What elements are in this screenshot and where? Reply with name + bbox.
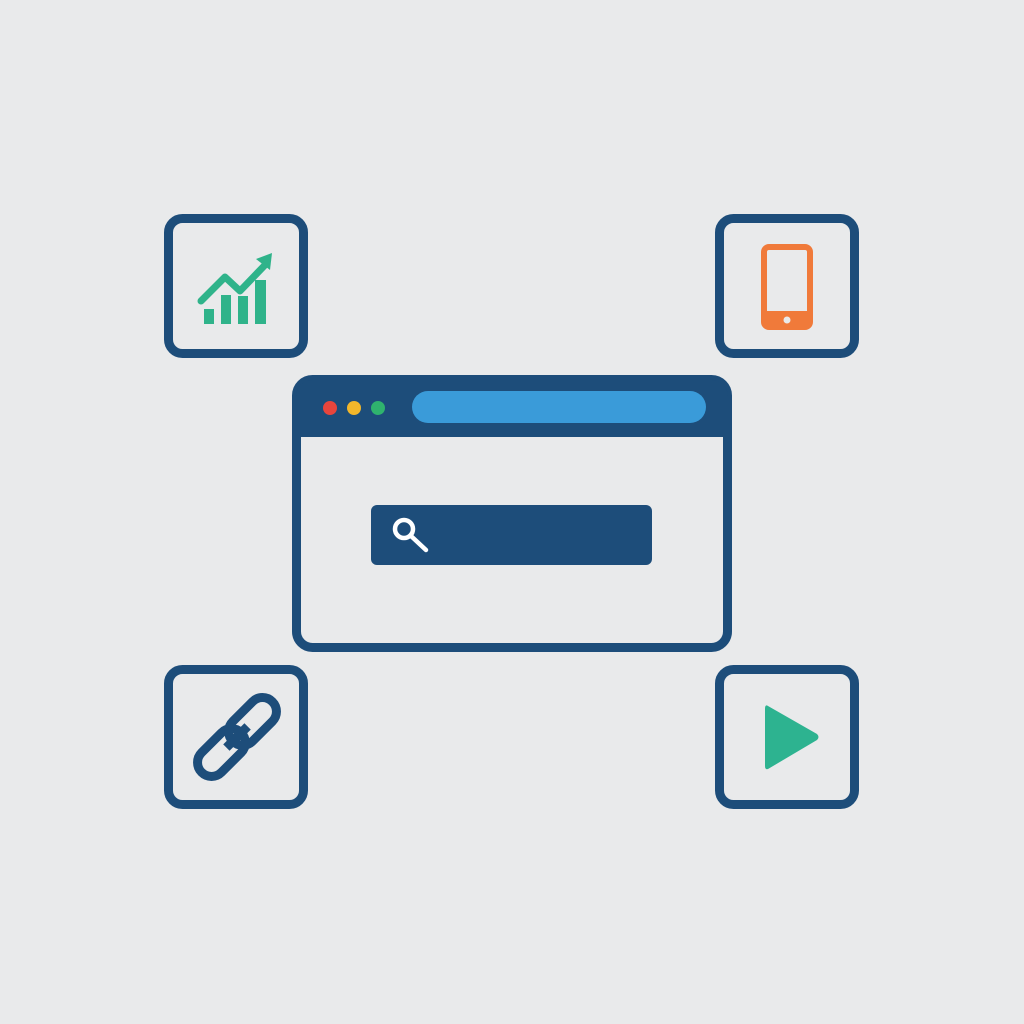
browser window: [296, 380, 728, 648]
icon: magnifier: [395, 520, 426, 550]
icon: bar chart with arrow: [201, 253, 272, 324]
icon: chain link: [192, 692, 282, 782]
icon: play triangle: [765, 705, 818, 769]
browser header bar: [296, 380, 728, 437]
icon box: play video: [720, 670, 854, 804]
window dots: [323, 401, 385, 415]
icon box: link: [168, 670, 304, 804]
search bar: [371, 505, 652, 565]
icon: phone: [764, 247, 810, 327]
address bar: [412, 391, 706, 423]
icon box: mobile phone: [720, 218, 854, 354]
icon box: growth chart: [168, 218, 304, 354]
